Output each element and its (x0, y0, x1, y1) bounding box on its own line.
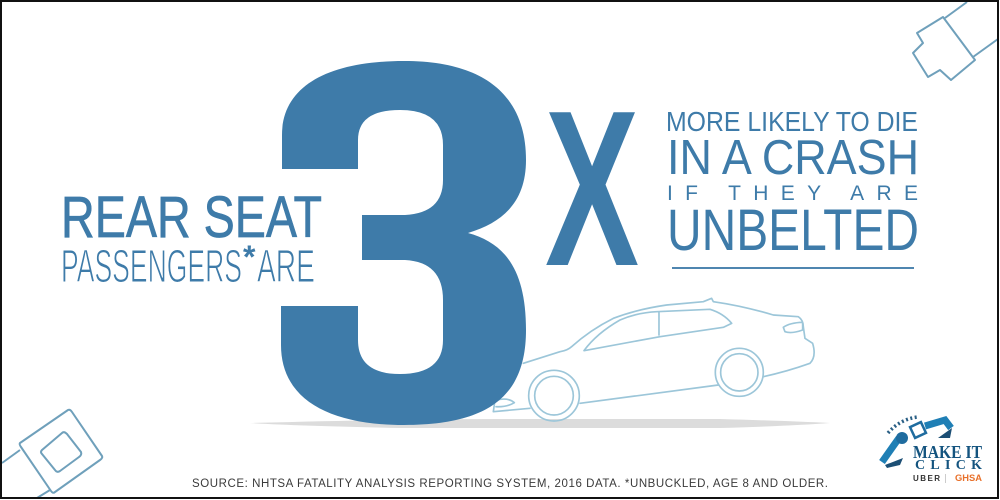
car outline (493, 298, 814, 421)
logo wordmark: MAKE IT (913, 442, 982, 462)
heading: rear seat passengers are: * (243, 239, 256, 275)
heading: rear seat passengers are: PASSENGERS (61, 240, 242, 292)
logo: make it click: UBER (913, 474, 940, 483)
heading: rear seat passengers are: ARE (257, 240, 315, 292)
logo: make it click: CLICK (915, 458, 982, 473)
heading: rear seat passengers are: REAR SEAT (61, 185, 322, 250)
statement text: more likely to die in a crash: MORE LIKELY TO DIE (666, 106, 918, 137)
seat belt buckle: bottom left (2, 410, 102, 498)
statement text: more likely to die in a crash: IN A CRASH (667, 131, 919, 185)
heading: rear seat passengers are (61, 185, 322, 292)
logo: make it click: GHSA (955, 473, 983, 483)
divider rule (672, 267, 914, 269)
icon: seat belt (882, 417, 952, 468)
logo: make it click (882, 417, 983, 483)
statement text: more likely to die in a crash: UNBELTED (667, 198, 919, 263)
multiplier X: X (545, 66, 639, 313)
statement text: more likely to die in a crash (666, 106, 919, 263)
ground shadow (250, 419, 830, 428)
source note: SOURCE: NHTSA FATALITY ANALYSIS REPORTING SYSTEM, 2016 DATA. *UNBUCKLED, AGE 8 AND OLDER. (192, 478, 828, 490)
statement text: more likely to die in a crash: IF THEY ARE (667, 182, 918, 205)
seat belt buckle: top right (913, 2, 998, 80)
